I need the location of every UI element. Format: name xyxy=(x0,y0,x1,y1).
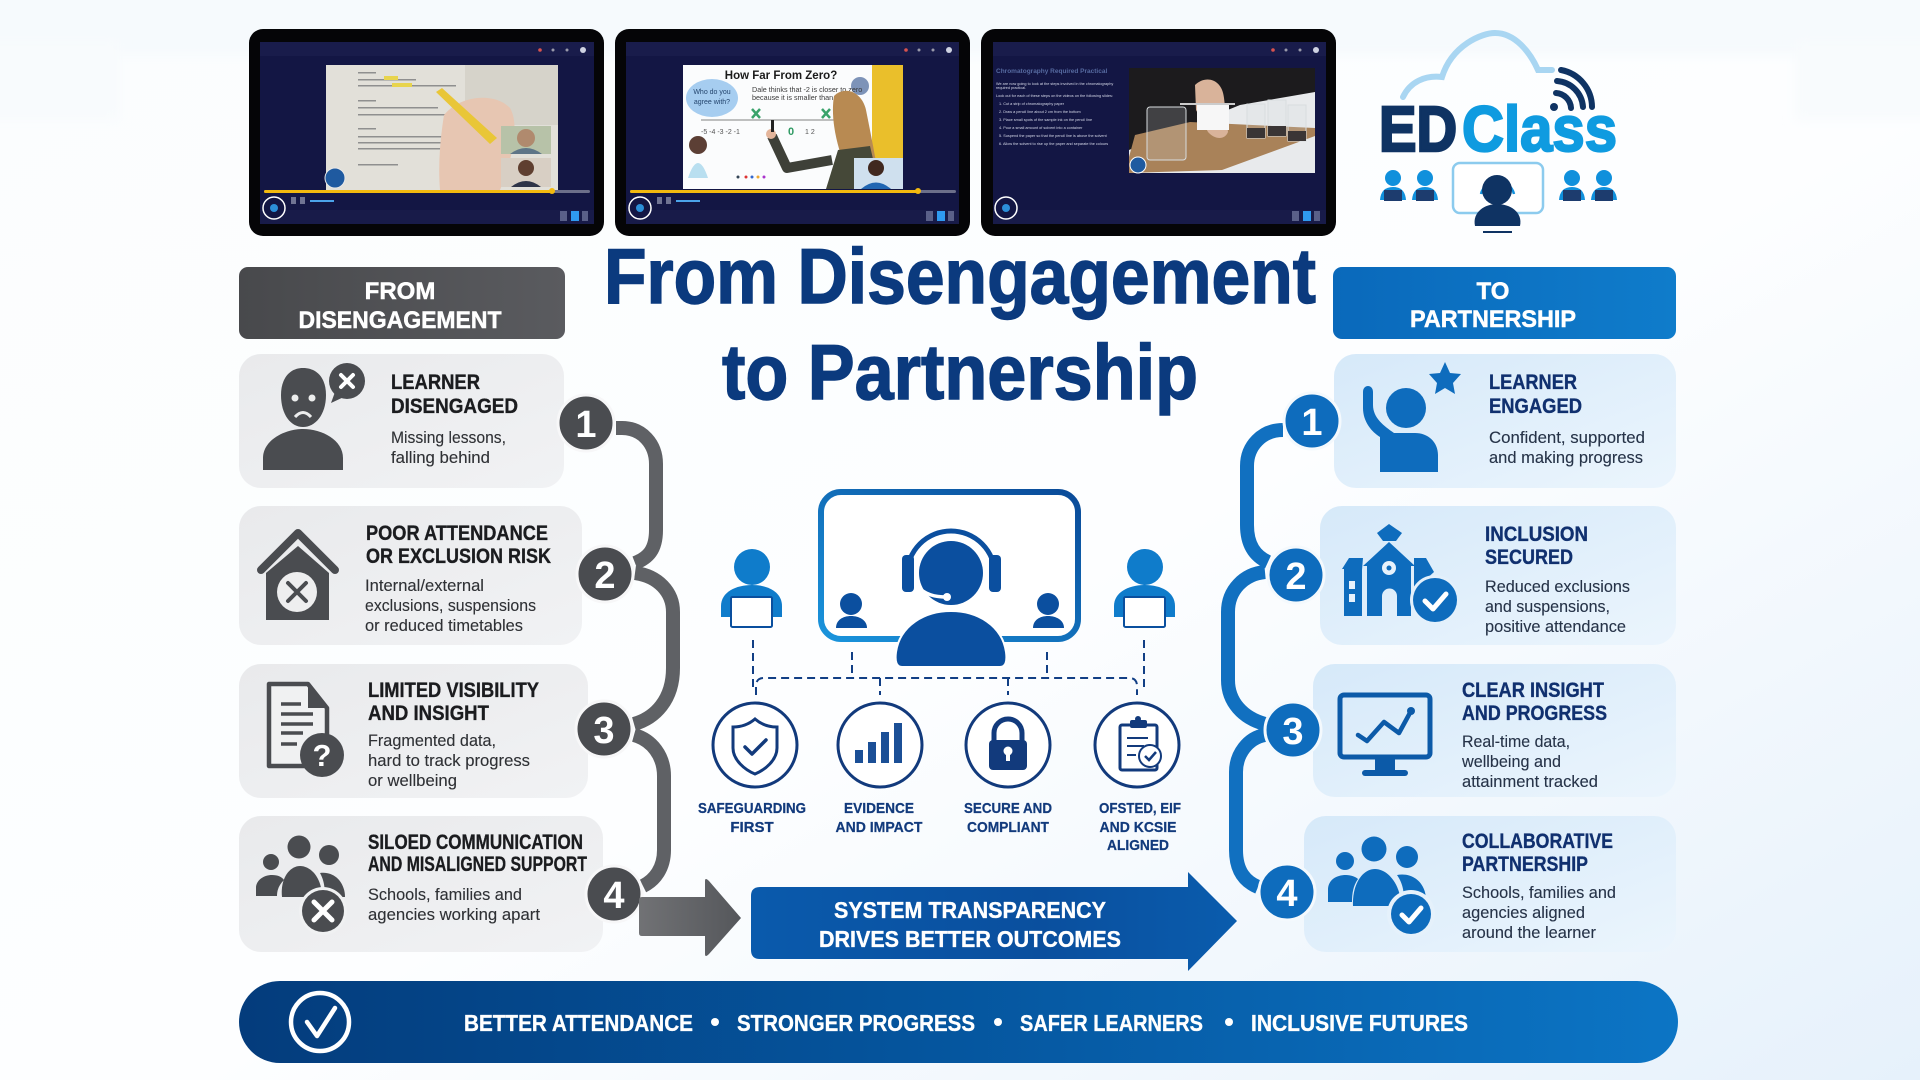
screenshot: handwriting lesson xyxy=(249,29,604,236)
icon: padlock xyxy=(989,719,1027,770)
screenshot: chromatography practical: We are now going to look at the steps involved in the chromatography xyxy=(996,82,1113,86)
panel: learner engaged: and making progress xyxy=(1489,448,1643,467)
pillar: ofsted aligned xyxy=(1095,703,1181,854)
icon: clipboard with check xyxy=(1120,716,1161,770)
panel: learner disengaged: LEARNER xyxy=(391,371,480,394)
panel: siloed communication: agencies working apart xyxy=(368,905,540,924)
screenshot: how far from zero lesson: -5 -4 -3 -2 -1 xyxy=(701,129,740,136)
screenshot: chromatography practical: 3. Place small spots of the sample ink on the pencil line xyxy=(999,118,1092,122)
heading: from disengagement: FROM xyxy=(365,278,435,305)
panel: inclusion secured xyxy=(1320,506,1676,645)
heading: to partnership xyxy=(1333,267,1676,339)
panel: clear insight xyxy=(1313,664,1676,797)
panel: clear insight: Real-time data, xyxy=(1462,732,1570,751)
screenshot: how far from zero lesson: How Far From Zero? xyxy=(725,70,837,82)
panel: poor attendance: POOR ATTENDANCE xyxy=(366,522,548,545)
panel: limited visibility: AND INSIGHT xyxy=(368,702,489,725)
pillar: evidence and impact xyxy=(836,703,922,836)
pillar: secure and compliant: SECURE AND xyxy=(964,800,1052,817)
logo: EDClass: ED xyxy=(1379,93,1457,165)
panel: collaborative partnership: Schools, families and xyxy=(1462,883,1616,902)
panel: learner engaged xyxy=(1334,354,1676,488)
panel: limited visibility: or wellbeing xyxy=(368,771,457,790)
panel: siloed communication xyxy=(239,816,603,952)
panel: limited visibility: hard to track progress xyxy=(368,751,530,770)
panel: siloed communication: Schools, families and xyxy=(368,885,522,904)
panel: learner disengaged: Missing lessons, xyxy=(391,428,506,447)
panel: learner engaged: Confident, supported xyxy=(1489,428,1645,447)
title xyxy=(604,232,1316,416)
pillar: ofsted aligned: ALIGNED xyxy=(1107,837,1169,854)
panel: poor attendance: OR EXCLUSION RISK xyxy=(366,545,551,568)
panel: collaborative partnership: PARTNERSHIP xyxy=(1462,853,1588,876)
screenshots row xyxy=(249,29,1336,236)
screenshot: how far from zero lesson xyxy=(615,29,970,236)
arrow: system transparency: SYSTEM TRANSPARENCY xyxy=(834,897,1106,923)
panel: inclusion secured: and suspensions, xyxy=(1485,597,1610,616)
logo: EDClass: Class xyxy=(1462,93,1617,165)
panel: limited visibility: Fragmented data, xyxy=(368,731,496,750)
panel: inclusion secured: Reduced exclusions xyxy=(1485,577,1630,596)
screenshot: chromatography practical: 6. Allow the solvent to rise up the paper and separate the colours xyxy=(999,142,1108,146)
panel: poor attendance: exclusions, suspensions xyxy=(365,596,536,615)
arrow: system transparency: DRIVES BETTER OUTCOMES xyxy=(819,926,1121,952)
screenshot: chromatography practical xyxy=(981,29,1336,236)
icon: group with check xyxy=(1328,836,1435,938)
icon: document with question xyxy=(269,684,344,777)
panel: inclusion secured: positive attendance xyxy=(1485,617,1626,636)
pillar: ofsted aligned: OFSTED, EIF xyxy=(1099,800,1181,817)
number badges: right: 1 xyxy=(1301,402,1323,444)
icon: shield xyxy=(733,719,777,774)
panel: learner engaged: ENGAGED xyxy=(1489,395,1582,418)
panel: poor attendance: or reduced timetables xyxy=(365,616,523,635)
heading: to partnership: TO xyxy=(1477,278,1509,305)
number badges: right: 2 xyxy=(1285,556,1307,598)
heading: from disengagement: DISENGAGEMENT xyxy=(298,307,502,334)
panel: siloed communication: AND MISALIGNED SUPPORT xyxy=(368,853,587,876)
icon: bar chart xyxy=(855,723,902,763)
screenshot: chromatography practical: Look out for each of these steps on the videos on the following slides: xyxy=(996,94,1113,98)
screenshot: chromatography practical: 5. Suspend the paper so that the pencil line is above the solvent xyxy=(999,134,1108,138)
panel: clear insight: attainment tracked xyxy=(1462,772,1598,791)
number badges: left: 4 xyxy=(603,875,625,917)
logo: EDClass xyxy=(1379,33,1617,233)
panel: clear insight: wellbeing and xyxy=(1461,752,1561,771)
panel: learner disengaged: DISENGAGED xyxy=(391,395,518,418)
number badges: right: 3 xyxy=(1282,711,1304,753)
icon: check circle xyxy=(291,993,349,1051)
screenshot: chromatography practical: 4. Pour a small amount of solvent into a container xyxy=(999,126,1083,130)
title: From Disengagement xyxy=(604,232,1316,320)
heading: to partnership: PARTNERSHIP xyxy=(1410,306,1576,333)
icon: document with question: ? xyxy=(313,738,331,773)
screenshot: chromatography practical: 2. Draw a pencil line about 2 cm from the bottom xyxy=(999,110,1081,114)
panel: collaborative partnership xyxy=(1304,816,1676,952)
footer banner: STRONGER PROGRESS xyxy=(737,1010,975,1036)
connector: left path xyxy=(616,428,673,886)
pillar: safeguarding first: FIRST xyxy=(730,819,774,836)
pillar: safeguarding first xyxy=(698,703,806,836)
title: to Partnership xyxy=(722,328,1198,416)
footer banner: SAFER LEARNERS xyxy=(1020,1010,1203,1036)
connector: right path xyxy=(1228,430,1283,887)
icon: group with cross xyxy=(256,836,347,935)
footer banner: INCLUSIVE FUTURES xyxy=(1251,1010,1468,1036)
number badges: left xyxy=(558,395,642,922)
number badges: left: 1 xyxy=(575,404,597,446)
icon: school with check xyxy=(1342,524,1460,625)
panel: inclusion secured: INCLUSION xyxy=(1485,523,1588,546)
number badges: left: 2 xyxy=(594,555,616,597)
pillar: evidence and impact: EVIDENCE xyxy=(844,800,914,817)
panel: siloed communication: SILOED COMMUNICATION xyxy=(368,831,583,854)
panel: limited visibility: LIMITED VISIBILITY xyxy=(368,679,539,702)
icon: monitor with rising chart xyxy=(1340,695,1430,776)
pillar: safeguarding first: SAFEGUARDING xyxy=(698,800,806,817)
number badges: right xyxy=(1259,393,1340,920)
panel: clear insight: CLEAR INSIGHT xyxy=(1462,679,1604,702)
panel: learner engaged: LEARNER xyxy=(1489,371,1577,394)
agent with headset xyxy=(896,531,1006,667)
arrow: system transparency xyxy=(751,872,1237,971)
panel: learner disengaged xyxy=(239,354,564,488)
heading: from disengagement xyxy=(239,267,565,339)
screenshot: chromatography practical: 1. Cut a strip of chromatography paper xyxy=(999,102,1065,106)
screenshot: how far from zero lesson: 1 2 xyxy=(805,129,815,136)
pillar: secure and compliant xyxy=(964,703,1052,836)
icon: house with cross xyxy=(261,533,335,620)
icon: sad learner xyxy=(263,363,365,470)
panel: learner disengaged: falling behind xyxy=(391,448,490,467)
panel: collaborative partnership: COLLABORATIVE xyxy=(1462,830,1613,853)
student left xyxy=(721,549,782,627)
screenshot: chromatography practical: Chromatography Required Practical xyxy=(996,68,1107,75)
screenshot: how far from zero lesson: 0 xyxy=(788,126,794,138)
screenshot: chromatography practical: required practical. xyxy=(996,86,1026,90)
number badges: right: 4 xyxy=(1276,873,1298,915)
number badges: left: 3 xyxy=(593,710,615,752)
pillar: ofsted aligned: AND KCSIE xyxy=(1100,819,1176,836)
central diagram: online classroom xyxy=(721,492,1175,695)
panel: inclusion secured: SECURED xyxy=(1485,546,1573,569)
screenshot: how far from zero lesson: Who do you xyxy=(693,89,731,96)
icon: learner raising hand with star xyxy=(1363,362,1461,472)
arrow: grey xyxy=(639,879,741,956)
screenshot: how far from zero lesson: because it is smaller than 2. xyxy=(752,93,841,102)
footer banner xyxy=(239,981,1678,1063)
pillar: evidence and impact: AND IMPACT xyxy=(836,819,922,836)
panel: limited visibility xyxy=(239,664,588,798)
panel: collaborative partnership: around the learner xyxy=(1462,923,1596,942)
footer banner: BETTER ATTENDANCE xyxy=(464,1010,693,1036)
panel: poor attendance: Internal/external xyxy=(365,576,484,595)
panel: clear insight: AND PROGRESS xyxy=(1462,702,1607,725)
student right xyxy=(1114,549,1175,627)
screenshot: how far from zero lesson: Dale thinks that -2 is closer to zero xyxy=(752,85,862,94)
panel: poor attendance xyxy=(239,506,582,645)
monitor xyxy=(821,492,1078,639)
panel: collaborative partnership: agencies aligned xyxy=(1462,903,1585,922)
pillar: secure and compliant: COMPLIANT xyxy=(967,819,1049,836)
screenshot: how far from zero lesson: agree with? xyxy=(694,99,730,106)
dashed connectors xyxy=(753,640,1144,695)
students in monitor xyxy=(836,593,1064,628)
